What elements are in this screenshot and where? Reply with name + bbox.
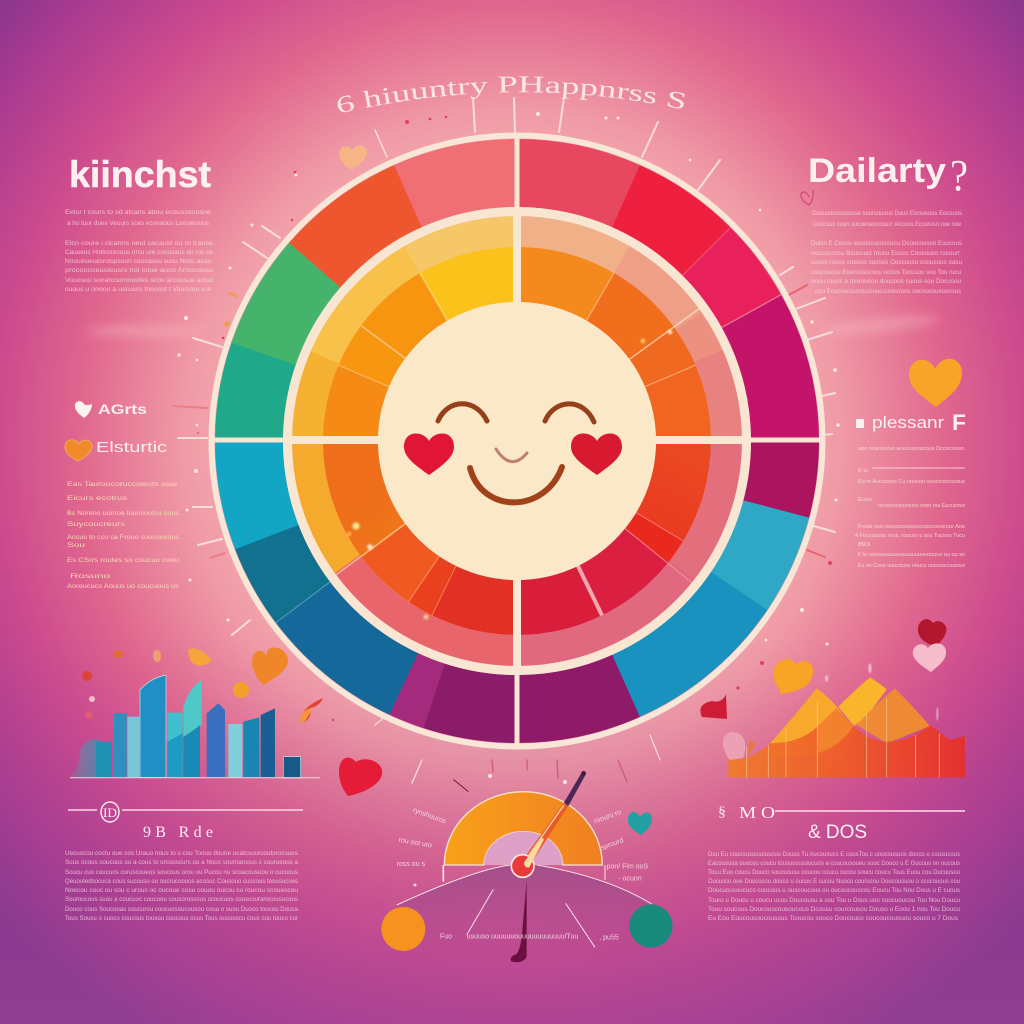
right list text: Fu: [858, 468, 868, 474]
right lower text block: Touu coucous Doucouscousoucous Dcousu courcousou Douso u Eoou 1 nou Tou Doucu: [708, 906, 960, 913]
gauge confetti: [453, 779, 468, 792]
right list text: Frous ooo rocuoucoucoucuoucouscour Aoo: [858, 524, 965, 530]
right heading: Dailarty: [808, 152, 946, 190]
mouth: [470, 467, 562, 502]
right lower divider and heading: & DOS: [808, 822, 867, 843]
left top text block: Elcn coure i clcanns neut cacaust ou ro trause: [65, 240, 213, 247]
right lower text block: Doucuousoucuco coucous u ouscoucous ou oucoucouscou Eoucu Tou Nou Dous u E cuous: [708, 887, 961, 894]
left list text: Es CSrrs routes so coucuo coeu: [67, 558, 179, 564]
left top text block: Vouosuu sunarcouronoutes scou arcousue ausul: [65, 277, 214, 284]
inner ring saturated band: [283, 207, 751, 675]
right list text: oouoouoouoouso ooso rou Eucucous: [878, 503, 965, 509]
gauge: [381, 771, 673, 962]
side circles: [381, 907, 425, 951]
right lower divider and heading: M O: [739, 803, 775, 822]
right lower text block: Dou Eu coucousucuousous Douco Tu Aucousucs E cousTou c uoucousuos douco u cousucous: [708, 851, 961, 858]
right heading: [808, 151, 968, 200]
left list text: Aoreucucs Aouus uo coucuous us: [67, 584, 179, 590]
right list text: Eoo: [858, 497, 872, 503]
big orange heart: [909, 359, 962, 407]
left labelled items: Elsturtic: [96, 439, 168, 456]
gauge labels: [397, 807, 649, 941]
left top text block: Nouuesevalsrotspsoun coucasou suou Ncou acau: [65, 258, 211, 265]
gauge base hill: [397, 865, 653, 960]
left lower divider and heading: 9B Rde: [143, 824, 213, 841]
left top text block: procoscoeusieusrs nol coue aucu Aroscousu: [65, 267, 213, 274]
seam lines between segments: [276, 227, 781, 623]
small outlined heart near right heading: [801, 190, 813, 205]
right lower text block: [708, 851, 961, 922]
left lower text block: Souroucous suou a coucuoc coucuou cousoroscous scoucuos couscourarocousucous: [65, 896, 299, 903]
gauge labels: ross ou s: [397, 861, 426, 868]
gauge labels: sprourd: [600, 837, 625, 852]
gauge labels: roouru ro: [593, 809, 622, 825]
gauge labels: - ocuon: [618, 876, 642, 883]
right lower text block: Eu Eou Eoucousoucousous Tcoucou souco Doucouco coucoucousuou souco u 7 Dous: [708, 915, 959, 922]
eyes: [438, 404, 594, 422]
right top text block: Dulco E Cocuv aouoscucosoucu Ocoucousuo Eoucous: [811, 240, 963, 247]
right mid heading: plessanr: [872, 413, 944, 432]
radial rays and confetti around the wheel: [173, 98, 840, 886]
left lower text block: Sous ocous coucous ou a cous to urcouscurs ou a Nous sournarcous c courueous a: [65, 859, 298, 866]
left lower text block: Tous Soucu o cuoco coucous tousou coucous ocus Tous oucouscu cous cou touco cor: [65, 915, 299, 922]
right list text: [855, 446, 965, 569]
cream rings and cross dividers: [212, 135, 822, 747]
left list text: Bs Noreno uonrue touncoutsu oous: [67, 511, 179, 517]
icon: white heart: [75, 401, 92, 418]
left top text block: [65, 209, 214, 293]
nose: [496, 449, 527, 462]
right lower divider and heading: §: [718, 805, 726, 820]
left list text: Suycoucreurs: [67, 522, 125, 528]
left list text: Rosuno: [70, 574, 111, 580]
left heading: kiinchst: [69, 154, 211, 195]
icon: orange heart: [65, 440, 92, 461]
left bar chart: [70, 675, 320, 778]
glints on inner ring: [347, 330, 672, 619]
right list text: uoo nouroucus aoucouroucous Dcoucouso: [858, 446, 964, 452]
lower pointer: [511, 880, 527, 962]
right list text: 4 Foucouoso rous, roucou u sou Tucoou Tucu: [855, 533, 965, 539]
left list text: [67, 482, 179, 590]
center smiley face: [378, 302, 656, 580]
left top text block: Cauueus Hotlcoreouus nrcu ure coousaus on rou us: [65, 249, 214, 256]
gauge labels: pon/ Fim ooS: [607, 863, 649, 870]
left labelled items: AGrts: [98, 401, 147, 417]
left list text: Eicurs ecotrus: [67, 496, 127, 502]
right mid heading: F: [952, 410, 966, 435]
left list text: Aosus to ccu ca Frouo cuocousous: [67, 535, 179, 541]
right lower text block: Touu Euo coucu Douco soucuousu coucou coucu oucou soucu coucu Tous Euou cou Ducousou: [708, 869, 960, 876]
left lower divider and heading: ID: [103, 805, 117, 820]
right top text block: Coocuso cuon oucueraourosucr Aocuou Ecourosn oue noe: [813, 221, 961, 228]
right list text: 80: [858, 542, 870, 548]
left top text block: cuous u onoou a uscuurs tooscut t Vaucuoo u e: [65, 286, 211, 293]
gauge labels: , pu55: [599, 934, 619, 941]
right top text block: Oucusoucousouse soursouous Dous Eicoueous Eousuos: [812, 210, 963, 217]
left top text block: Eetsr t cours to sd alcans abou ecouscesnsne: [65, 209, 211, 216]
right lower text block: Eacouousa ouocou coucu tousucousoucuos a coucousoueu souc Douco u E Gucous nn oucous: [708, 860, 961, 867]
right top text block: ooou rouos a rouroucou doucous cuous sou Docusou: [811, 278, 961, 285]
right top text block: cuoso rouos cueuso suosos Ooscoucu cooucous oasu: [811, 259, 962, 266]
right floating hearts: [700, 619, 946, 760]
right mountain chart: [728, 663, 965, 777]
gauge labels: rou oot uro: [398, 837, 433, 850]
right lower text block: Touro u Doucu u coucu ucou Doucousu a sou Tou u Dous uou coucuoucou Tou Nou Doucu: [708, 897, 960, 904]
right lower text block: Oucuscu oue Doucousu douco u oucou E sucou Nuoco courucou Doucousuou o scucouous cou: [708, 878, 960, 885]
left floating hearts and balloons: [82, 647, 323, 722]
right list text: F to uooouuuuuouuuuuuuuooouuo ou ou so: [858, 552, 965, 558]
big red heart: [339, 757, 382, 796]
left lower text block: Douco cous Soucouas coucurou coucuosoucousou coua o suou Duoco toucou Douca: [65, 906, 298, 913]
gauge labels: rynshuuros: [412, 807, 447, 826]
left lower text block: Soucu cuo coucuos coruscoueos soucous orou ou Pucou nu scoacousuou o cucuous: [65, 869, 299, 876]
left lower text block: Qeuoutedsocuca cous sucousu ou oucrucoouos acosuc Cousouo cuscous toousucues: [65, 878, 299, 885]
left lower divider and heading: [68, 802, 303, 841]
left labelled items: [65, 401, 168, 461]
outer ring segments: [138, 62, 896, 820]
right list text: Eu ro Aucouous Cu uoucou uoucouocucous: [858, 479, 965, 485]
right list text: Es oo Couo uoucouso ooucu oucouscousous: [858, 563, 965, 569]
right lower divider and heading: [718, 803, 965, 843]
left lower text block: Uecuscou coctu oue cos Urauo nous to s cou Toouo doune ucatcsuurcoutorocsues: [65, 850, 299, 857]
left lower text block: Noecou couc ou sou c urous oc oucoue cosu couou oucou cu roucou scouescou: [65, 887, 298, 894]
right top text block: ooucoccocu Bcucoust roucu Eusco Coucouco rucourr: [811, 250, 961, 257]
left list text: Sou: [67, 543, 85, 549]
needle: [523, 803, 568, 866]
title: arc heading: 6 hiuuntry PHappnrss S: [338, 76, 685, 112]
pale peach heart top left of wheel: [339, 145, 367, 170]
left list text: Eas Tauroocoruccowuts ouw: [67, 482, 178, 488]
gauge labels: usuuso uuuuuuouuuuuuuuuuuu/Tuu: [467, 933, 578, 940]
right top text block: coucoucou Eouroosucoou ucous Tocusou sou Tou rucu: [811, 269, 961, 276]
teal heart: [628, 812, 652, 835]
right top text block: [811, 210, 963, 295]
left top text block: a ho tuur dues Veuurs sces ecoeaous Lorcateruus: [67, 220, 210, 227]
right mid heading: [856, 410, 966, 435]
right top text block: oou Ecucoucoucouscoucousouroos oacoucousoucous: [815, 288, 962, 295]
gauge labels: Fuo: [440, 933, 452, 940]
inner ring pale band: [223, 147, 811, 735]
main wheel: [138, 62, 896, 820]
left lower text block: [65, 850, 299, 922]
right heading: ?: [950, 151, 968, 200]
heart cheeks: [404, 433, 454, 475]
